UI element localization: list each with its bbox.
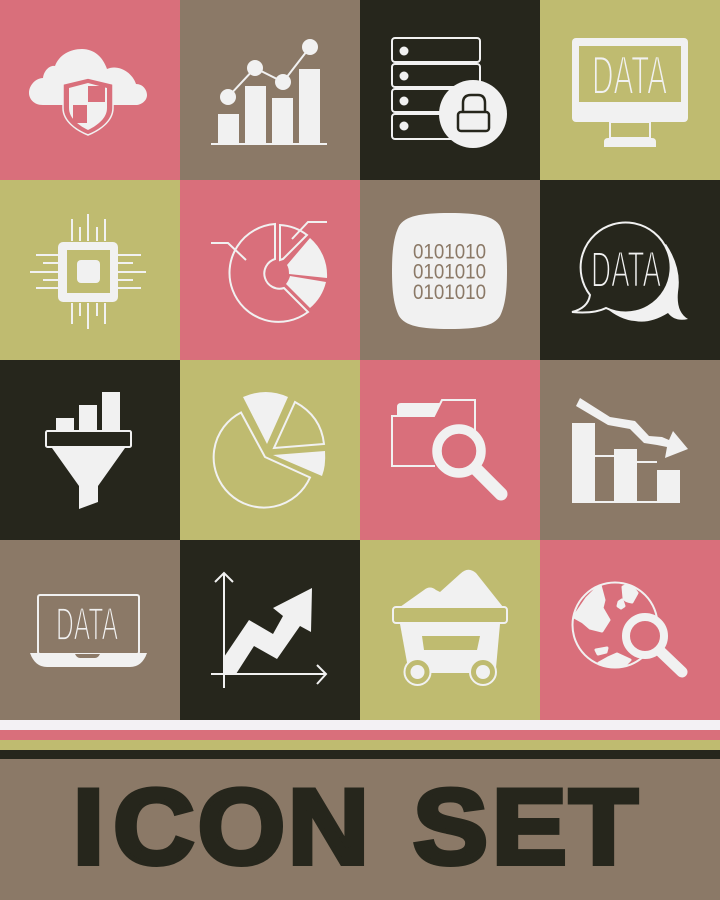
panel: donut chart [180,180,360,360]
panel: declining bar chart [540,360,720,540]
stripes band [0,720,720,759]
title: icon set: ICON SET [73,768,638,887]
panel: growth arrow chart [180,540,360,720]
panel: monitor data [540,0,720,180]
panel: speech bubbles data: DATA [591,241,661,298]
panel: cloud shield [0,0,180,180]
panel: bar chart with line [180,0,360,180]
panel: speech bubbles data [540,180,720,360]
panel: server lock [360,0,540,180]
panel: mine cart [360,540,540,720]
panel: laptop data: DATA [56,598,118,650]
panel: filter funnel [0,360,180,540]
panel: cpu chip [0,180,180,360]
panel: binary code: 0101010 [413,260,486,284]
panel: globe search [540,540,720,720]
panel: binary code: 0101010 [413,280,486,304]
panel: laptop data [0,540,180,720]
panel: pie chart [180,360,360,540]
panel: folder search [360,360,540,540]
panel: binary code: 0101010 [413,240,486,264]
panel: binary code [360,180,540,360]
